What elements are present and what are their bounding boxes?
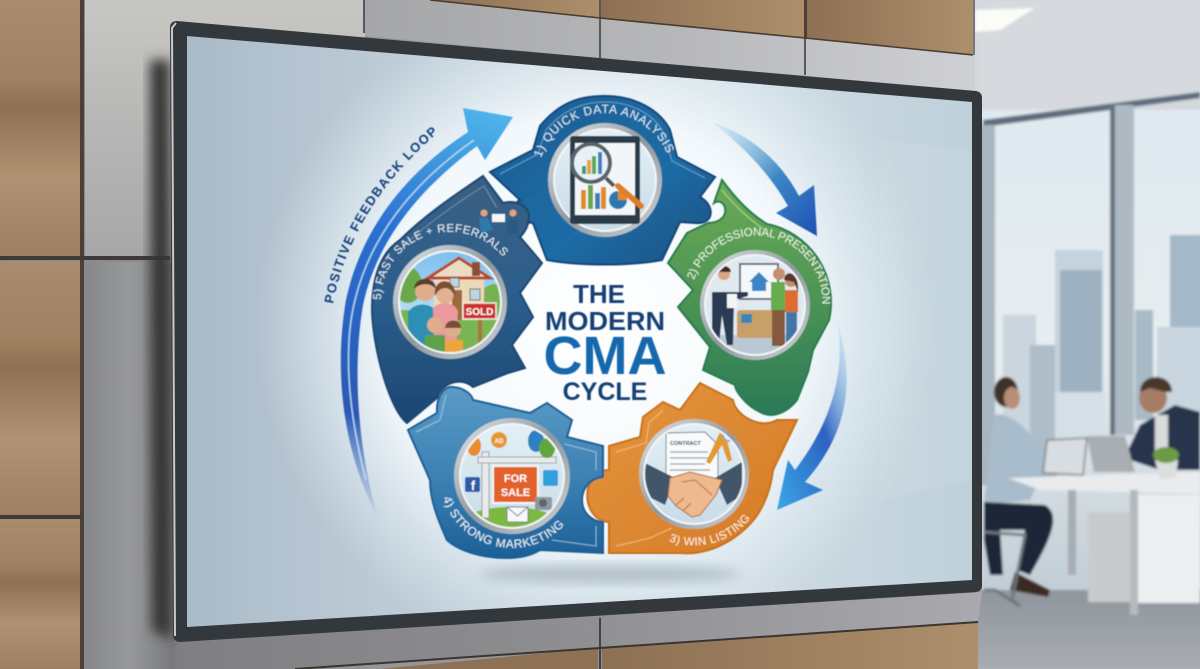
arrow: presentation to win listing xyxy=(777,325,847,510)
icon: facebook: f xyxy=(471,478,476,493)
for sale sign: FOR xyxy=(504,473,527,485)
for sale sign xyxy=(493,466,538,503)
icon: for sale sign with social icons: AD xyxy=(495,439,504,445)
panel: step 3 win listing xyxy=(585,381,800,556)
title: the modern CMA cycle: CYCLE xyxy=(563,378,647,406)
arrow: positive feedback loop xyxy=(341,108,513,518)
icon: envelope xyxy=(507,507,528,522)
icon: agent presenting to couple xyxy=(700,250,810,360)
icon: contract and handshake xyxy=(639,419,749,529)
panel: step 5 fast sale and referrals xyxy=(370,174,544,425)
panel: step 4 strong marketing xyxy=(406,385,605,560)
icon: referral handshake xyxy=(479,210,518,234)
arrow: data analysis to presentation xyxy=(712,122,817,236)
step 5 label: 5) FAST SALE + REFERRALS xyxy=(372,223,508,300)
icon: twitter xyxy=(543,470,558,486)
desk with laptops and plant xyxy=(1008,436,1200,615)
monitor bezel xyxy=(170,21,982,642)
title: the modern CMA cycle: MODERN xyxy=(545,306,665,336)
icon: contract and handshake: CONTRACT xyxy=(670,441,701,447)
step 3 label: 3) WIN LISTING xyxy=(669,514,750,546)
title: the modern CMA cycle xyxy=(544,279,666,406)
person at left of table xyxy=(984,377,1060,606)
icon: tablet with magnifier xyxy=(548,123,662,237)
icon: family with sold house xyxy=(393,245,511,360)
person at right of table xyxy=(1128,377,1200,470)
label: positive feedback loop: POSITIVE FEEDBACK LOOP xyxy=(324,126,436,304)
step 2 label: 2) PROFESSIONAL PRESENTATION xyxy=(686,226,832,304)
panel: step 1 quick data analysis xyxy=(488,94,717,266)
screen background xyxy=(187,36,972,627)
for sale sign: SALE xyxy=(501,487,530,499)
icon: camera xyxy=(535,497,552,510)
step 1 label: 1) QUICK DATA ANALYSIS xyxy=(534,104,674,158)
title: the modern CMA cycle: THE xyxy=(573,279,625,309)
step 4 label: 4) STRONG MARKETING xyxy=(442,496,564,549)
screen content xyxy=(187,36,972,627)
sold sign: SOLD xyxy=(466,307,493,318)
icon: for sale sign with social icons xyxy=(454,418,570,543)
panel: step 2 professional presentation xyxy=(666,178,833,417)
office background scene xyxy=(970,0,1200,669)
title: the modern CMA cycle: CMA xyxy=(544,326,666,386)
